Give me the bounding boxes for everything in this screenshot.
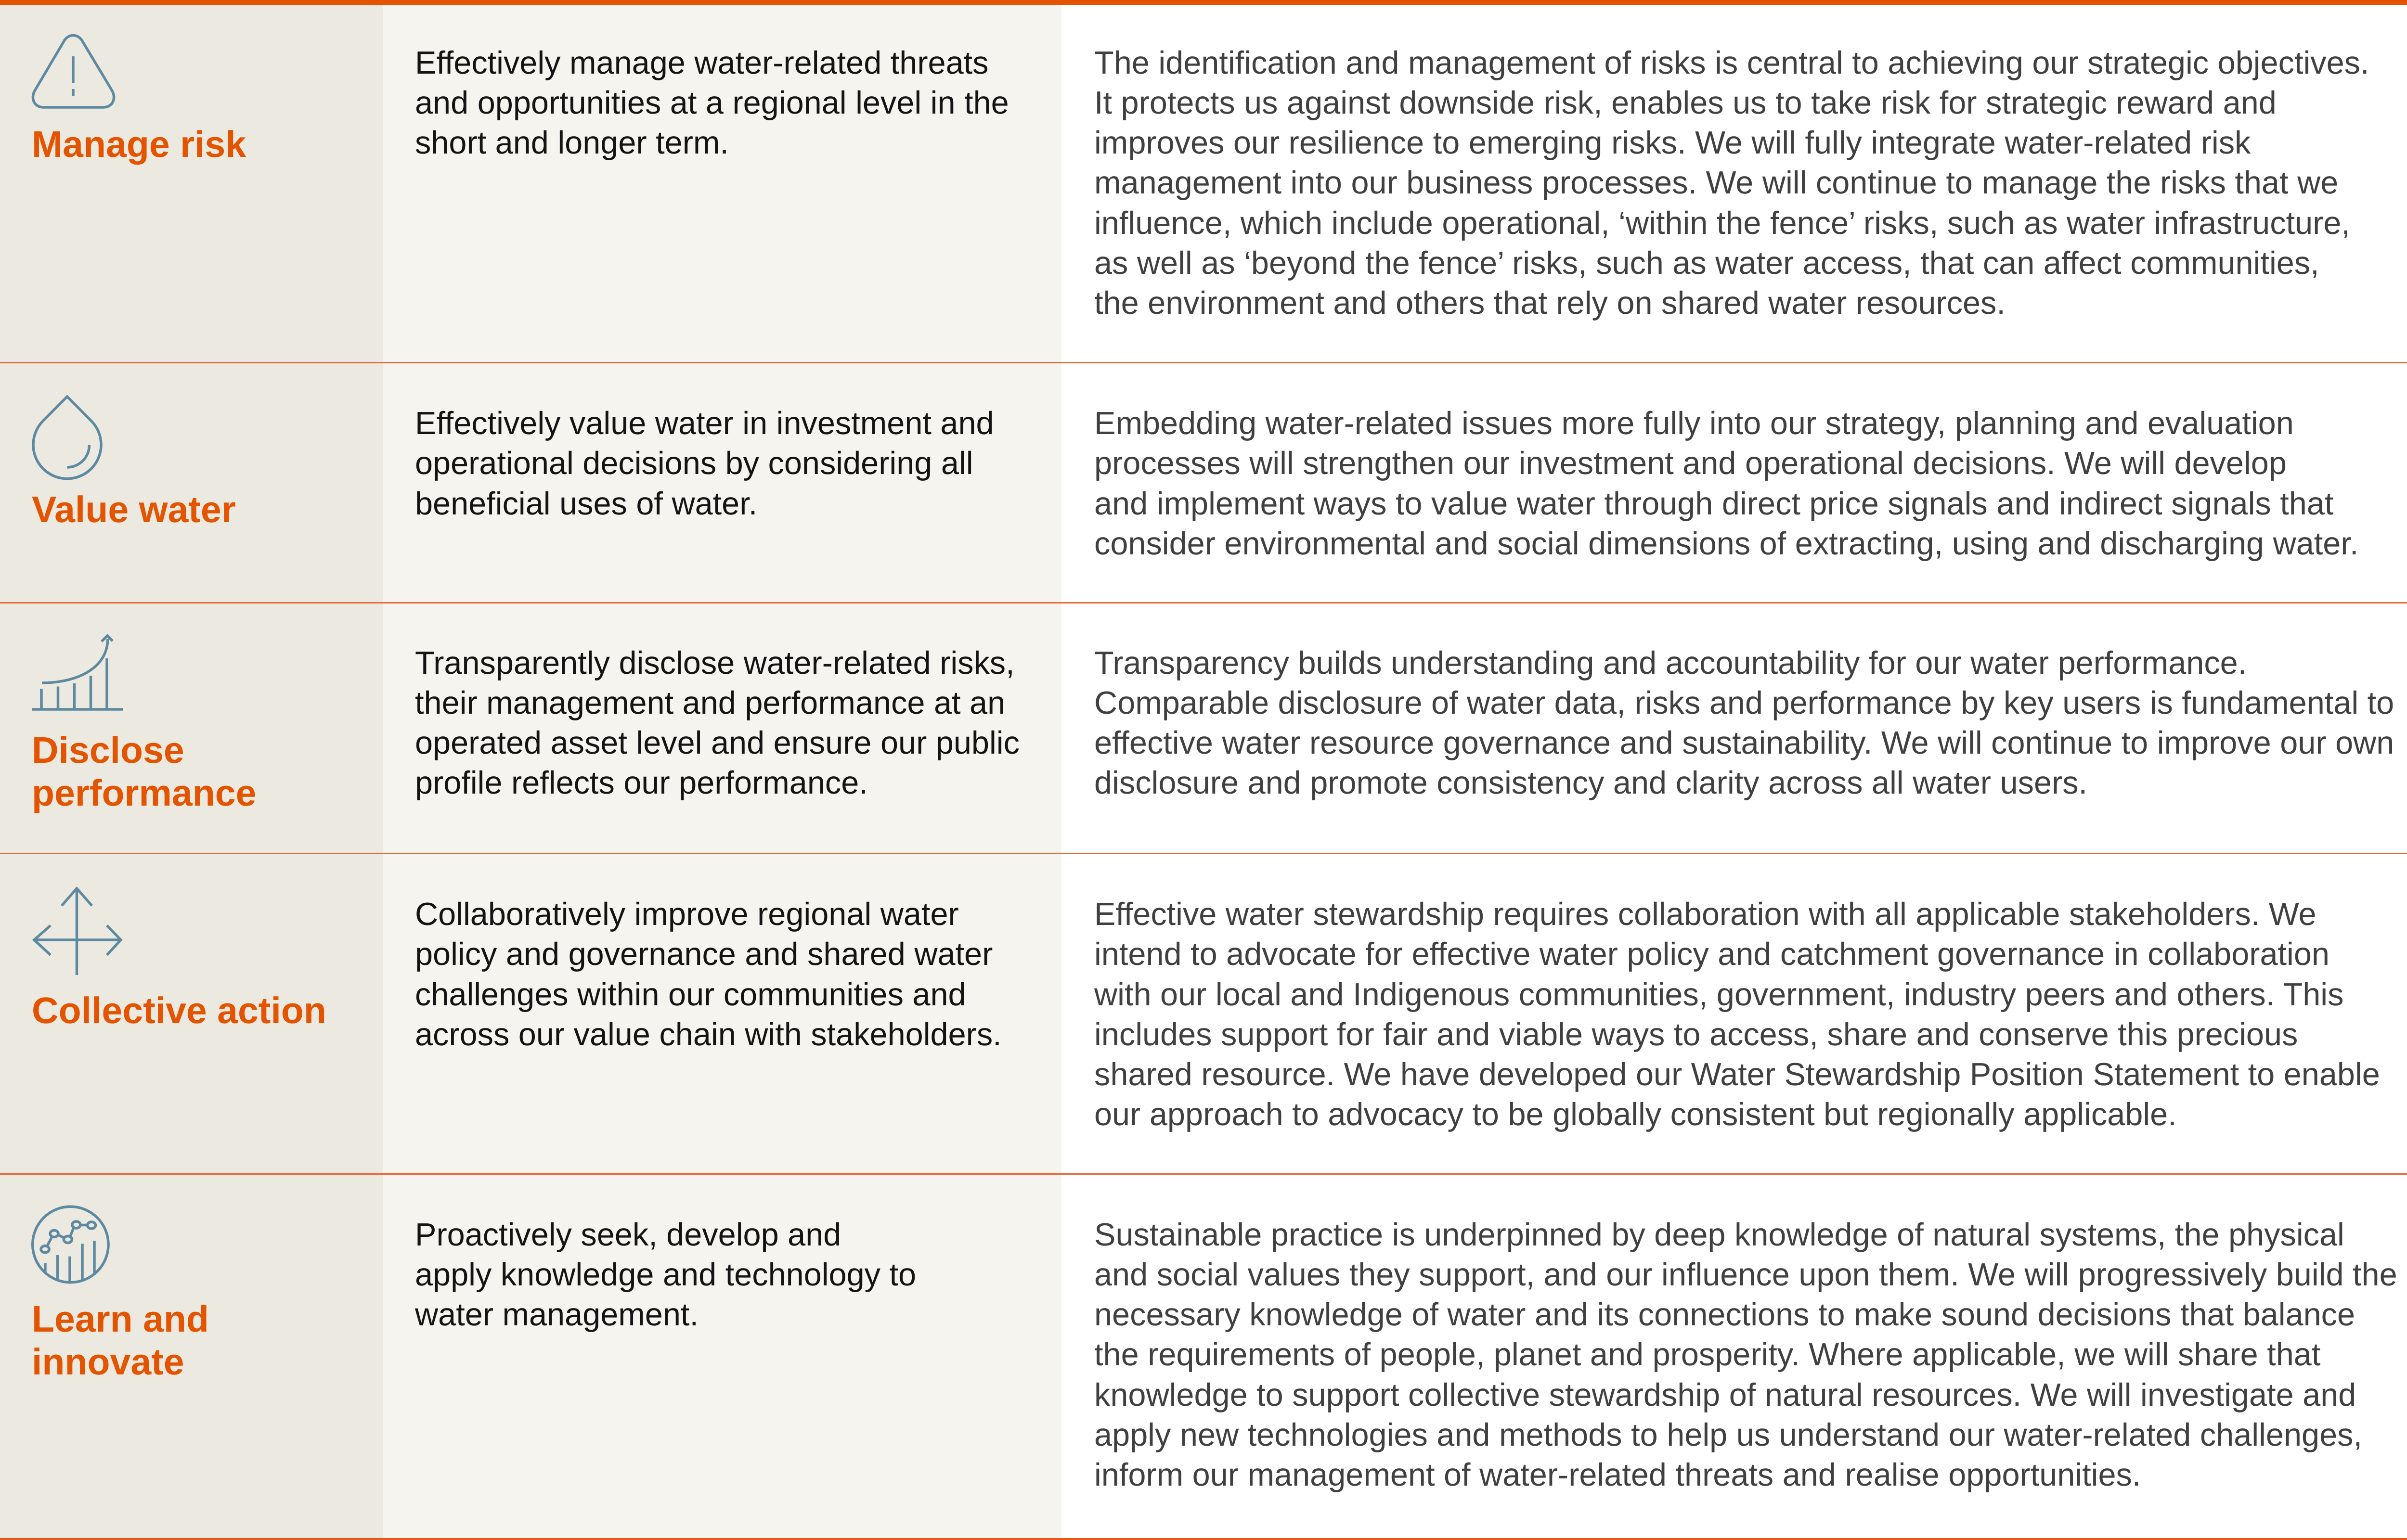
- heading: Learn and innovate: Learn and: [32, 1298, 209, 1340]
- text: learn and innovate description: and social values they support, and our influence upon them. We will progressively build the: [1094, 1257, 2397, 1293]
- text: manage risk objective: short and longer term.: [415, 125, 729, 161]
- text: disclose performance objective: [415, 645, 1020, 801]
- heading: Disclose performance: performance: [32, 772, 256, 814]
- text: learn and innovate description: necessary knowledge of water and its connections to make sound decisions that balance: [1094, 1297, 2355, 1333]
- text: collective action description: our approach to advocacy to be globally consistent but regionally applicable.: [1094, 1097, 2177, 1132]
- text: manage risk description: as well as ‘beyond the fence’ risks, such as water access, that can affect communities,: [1094, 245, 2319, 281]
- second column background: [383, 0, 1061, 1540]
- text: collective action description: Effective water stewardship requires collaboration with all applicable stakeholders. We: [1094, 897, 2316, 932]
- text: disclose performance objective: Transparently disclose water-related risks,: [415, 645, 1015, 680]
- text: value water description: Embedding water-related issues more fully into our strategy, planning and evaluation: [1094, 406, 2294, 441]
- text: collective action description: shared resource. We have developed our Water Stewardship Position Statement to enable: [1094, 1057, 2380, 1092]
- text: value water description: consider environmental and social dimensions of extracting, using and discharging water.: [1094, 526, 2358, 562]
- text: learn and innovate objective: water management.: [415, 1297, 699, 1333]
- text: disclose performance description: [1094, 645, 2394, 801]
- text: disclose performance description: Comparable disclosure of water data, risks and performance by key users is fundamental to: [1094, 685, 2394, 721]
- heading: Learn and innovate: [32, 1298, 209, 1383]
- heading: Collective action: Collective action: [32, 990, 326, 1031]
- first column background: [0, 0, 383, 1540]
- row divider 4: [0, 1173, 2407, 1175]
- icon: water drop: [33, 397, 101, 479]
- icon: four-way arrows: [34, 888, 121, 975]
- text: disclose performance description: Transparency builds understanding and accountability for our water performance.: [1094, 645, 2247, 680]
- top rule: [0, 0, 2407, 5]
- text: collective action objective: policy and governance and shared water: [415, 937, 993, 972]
- icon: data circle: [33, 1206, 108, 1283]
- text: manage risk objective: [415, 45, 1009, 161]
- row divider 1: [0, 362, 2407, 363]
- heading: Learn and innovate: innovate: [32, 1341, 184, 1383]
- text: manage risk description: It protects us against downside risk, enables us to take risk for strategic reward and: [1094, 85, 2277, 121]
- text: disclose performance objective: their management and performance at an: [415, 685, 1005, 721]
- text: collective action description: with our local and Indigenous communities, government, industry peers and others. This: [1094, 977, 2343, 1013]
- heading: Value water: Value water: [32, 489, 236, 530]
- text: learn and innovate description: knowledge to support collective stewardship of natural resources. We will investigate and: [1094, 1377, 2356, 1413]
- text: manage risk description: influence, which include operational, ‘within the fence’ risks, such as water infrastructure,: [1094, 205, 2350, 241]
- text: value water objective: [415, 406, 994, 522]
- row divider 2: [0, 602, 2407, 603]
- text: collective action description: intend to advocate for effective water policy and catchment governance in collaboration: [1094, 937, 2329, 972]
- text: learn and innovate description: [1094, 1215, 2397, 1496]
- text: learn and innovate objective: apply knowledge and technology to: [415, 1257, 916, 1293]
- text: collective action objective: [415, 897, 1002, 1052]
- text: disclose performance description: effective water resource governance and sustainability. We will continue to improve our own: [1094, 725, 2394, 761]
- text: manage risk description: [1094, 45, 2369, 321]
- heading: Manage risk: Manage risk: [32, 124, 246, 165]
- text: learn and innovate objective: [415, 1217, 916, 1333]
- text: value water objective: Effectively value water in investment and: [415, 406, 994, 441]
- text: learn and innovate objective: Proactively seek, develop and: [415, 1217, 841, 1252]
- text: collective action description: includes support for fair and viable ways to access, share and conserve this precious: [1094, 1017, 2298, 1052]
- text: manage risk description: The identification and management of risks is central to achieving our strategic objectives.: [1094, 45, 2369, 81]
- text: value water description: and implement ways to value water through direct price signals and indirect signals that: [1094, 486, 2333, 522]
- bottom rule: [0, 1538, 2407, 1540]
- text: disclose performance objective: operated asset level and ensure our public: [415, 725, 1020, 761]
- text: collective action objective: challenges within our communities and: [415, 977, 966, 1013]
- text: collective action objective: across our value chain with stakeholders.: [415, 1017, 1002, 1052]
- text: learn and innovate description: apply new technologies and methods to help us understand our water-related challenges,: [1094, 1417, 2362, 1453]
- text: collective action description: [1094, 897, 2380, 1132]
- row divider 3: [0, 853, 2407, 854]
- icon: warning triangle: [33, 36, 114, 107]
- heading: Disclose performance: Disclose: [32, 730, 184, 771]
- text: collective action objective: Collaboratively improve regional water: [415, 897, 959, 932]
- text: manage risk description: the environment and others that rely on shared water resources.: [1094, 285, 2006, 321]
- text: manage risk objective: Effectively manage water-related threats: [415, 45, 989, 81]
- text: learn and innovate description: Sustainable practice is underpinned by deep knowledge of natural systems, the physical: [1094, 1217, 2344, 1252]
- text: disclose performance description: disclosure and promote consistency and clarity across all water users.: [1094, 765, 2087, 801]
- text: manage risk objective: and opportunities at a regional level in the: [415, 85, 1009, 121]
- text: learn and innovate description: the requirements of people, planet and prosperity. Where applicable, we will share that: [1094, 1337, 2320, 1373]
- text: value water objective: beneficial uses of water.: [415, 486, 757, 522]
- text: value water description: [1094, 406, 2358, 562]
- text: value water description: processes will strengthen our investment and operational decisions. We will develop: [1094, 446, 2287, 481]
- heading: Disclose performance: [32, 730, 256, 814]
- text: learn and innovate description: inform our management of water-related threats and realise opportunities.: [1094, 1457, 2141, 1493]
- icon: rising bar chart: [32, 636, 123, 709]
- text: manage risk description: management into our business processes. We will continue to manage the risks that we: [1094, 165, 2338, 201]
- text: value water objective: operational decisions by considering all: [415, 446, 973, 481]
- text: manage risk description: improves our resilience to emerging risks. We will fully integrate water-related risk: [1094, 125, 2251, 161]
- text: disclose performance objective: profile reflects our performance.: [415, 765, 868, 801]
